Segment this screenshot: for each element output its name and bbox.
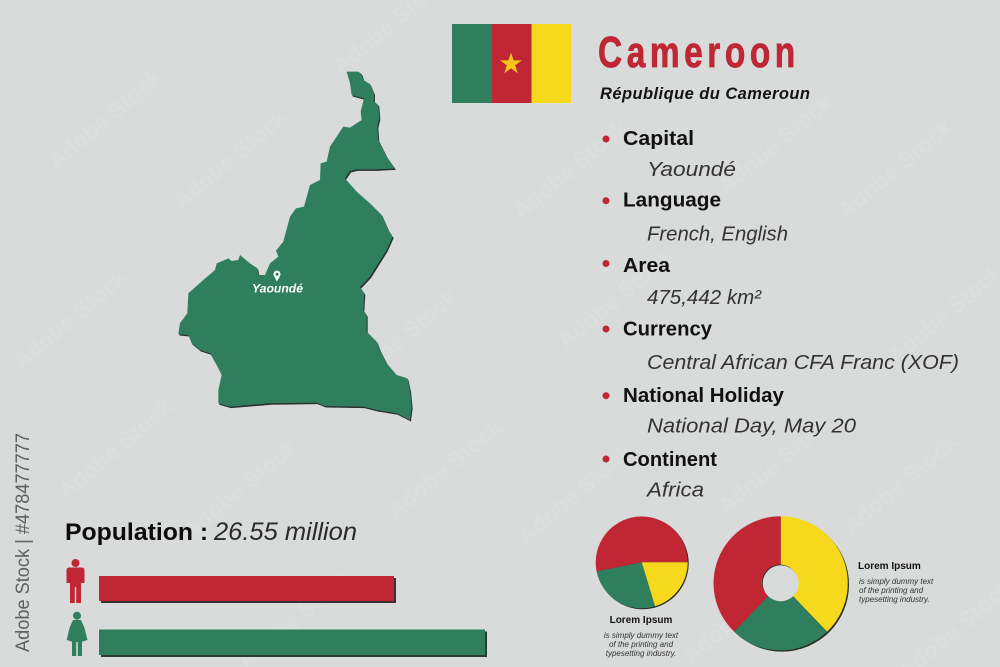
map of Cameroon	[178, 72, 413, 421]
fact: capital	[602, 128, 736, 181]
pie caption: Lorem Ipsum	[610, 615, 672, 626]
watermark pattern: Adobe Stock	[338, 284, 462, 394]
donut caption: of the printing and	[859, 586, 924, 595]
facts list	[602, 128, 959, 502]
donut caption	[858, 561, 934, 604]
subtitle: République du Cameroun	[600, 85, 810, 103]
pie caption: typesetting industry.	[606, 649, 676, 658]
watermark pattern: Adobe Stock	[213, 229, 337, 339]
fact: continent: Continent	[623, 449, 717, 471]
icon: flag star	[500, 52, 522, 73]
stock id vertical label: Adobe Stock | #478477777	[13, 433, 34, 652]
pie chart	[596, 516, 689, 609]
watermark pattern: Adobe Stock	[713, 89, 837, 199]
fact: area	[602, 255, 762, 309]
pie caption: of the printing and	[609, 640, 674, 649]
flag of Cameroon	[452, 24, 571, 103]
fact: language: Language	[623, 190, 721, 212]
map shadow	[179, 73, 413, 421]
icon: capital pin	[274, 271, 280, 282]
population heading: 26.55 million	[213, 518, 357, 546]
map land	[178, 72, 412, 420]
fact: national holiday	[602, 385, 856, 438]
donut caption: is simply dummy text	[859, 577, 934, 586]
watermark pattern: Adobe Stock	[713, 409, 837, 519]
population heading: :	[200, 519, 208, 546]
watermark pattern: Adobe Stock	[43, 64, 167, 174]
male population bar	[99, 576, 396, 603]
watermark pattern: Adobe Stock	[838, 429, 962, 539]
fact: area: Area	[623, 255, 671, 277]
fact: language: French, English	[647, 224, 788, 246]
donut caption: Lorem Ipsum	[858, 561, 921, 572]
female population bar	[99, 630, 487, 657]
watermark pattern: Adobe Stock	[53, 394, 177, 504]
watermark pattern: Adobe Stock	[508, 114, 632, 224]
fact: currency	[602, 319, 959, 374]
pie caption: is simply dummy text	[604, 631, 679, 640]
icon: male figure	[66, 559, 84, 603]
watermark pattern: Adobe Stock	[833, 114, 957, 224]
population heading: Population	[65, 519, 193, 546]
fact: national holiday: National Day, May 20	[647, 416, 856, 438]
fact: capital: Capital	[623, 128, 694, 150]
watermark pattern: Adobe Stock	[513, 439, 637, 549]
watermark pattern: Adobe Stock	[553, 244, 677, 354]
fact: continent: Africa	[646, 480, 704, 502]
fact: continent	[602, 449, 717, 502]
donut caption: typesetting industry.	[859, 595, 930, 604]
population heading	[65, 518, 357, 546]
fact: area: 475,442 km²	[647, 287, 762, 309]
fact: national holiday: National Holiday	[623, 385, 785, 407]
watermark pattern: Adobe Stock	[678, 559, 802, 667]
capital label: Yaoundé	[252, 284, 304, 296]
fact: language	[602, 190, 788, 246]
pie caption	[604, 615, 679, 658]
watermark pattern: Adobe Stock	[383, 414, 507, 524]
watermark pattern: Adobe Stock	[178, 434, 302, 544]
donut chart	[714, 516, 849, 652]
watermark pattern: Adobe Stock	[8, 264, 132, 374]
watermark pattern: Adobe Stock	[168, 104, 292, 214]
fact: capital: Yaoundé	[647, 159, 736, 181]
title: Cameroon	[598, 29, 800, 77]
fact: currency: Currency	[623, 319, 713, 341]
icon: female figure	[67, 612, 88, 656]
fact: currency: Central African CFA Franc (XOF)	[647, 352, 959, 374]
